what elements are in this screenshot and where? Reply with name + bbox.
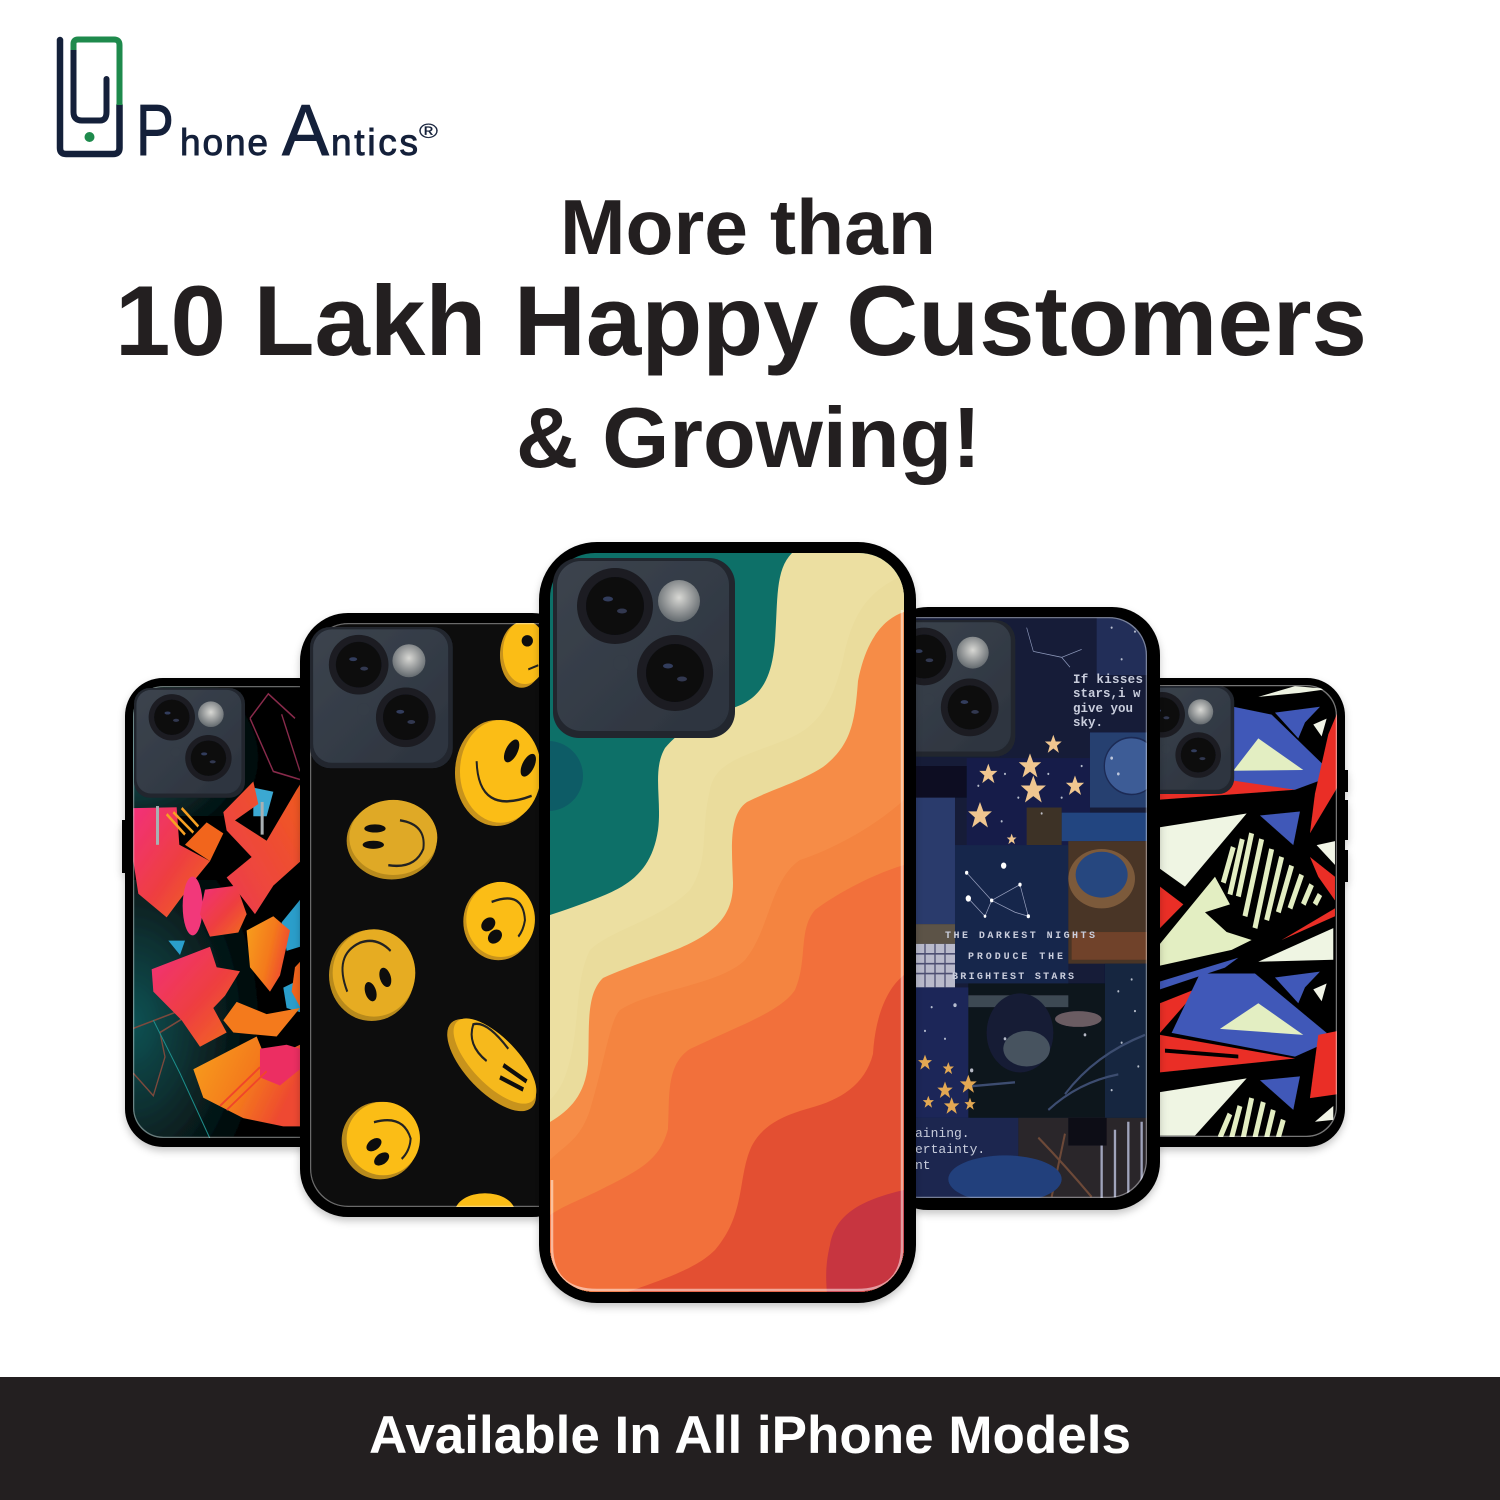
collage text: give you	[1073, 702, 1133, 716]
camera	[134, 688, 245, 798]
collage text	[915, 673, 1143, 1173]
collage text: THE DARKEST NIGHTS	[945, 931, 1095, 942]
logo wordmark: ntics	[331, 122, 418, 163]
collage text: PRODUCE THE	[968, 952, 1063, 963]
smiley 5	[329, 929, 415, 1021]
camera	[877, 620, 1015, 757]
phone case: orange waves (centre)	[513, 542, 916, 1303]
icon: phone logo mark	[60, 40, 120, 154]
smiley 6	[447, 1018, 536, 1112]
logo wordmark: ®	[419, 121, 438, 143]
footer bar	[0, 1377, 1500, 1500]
title	[115, 183, 1367, 486]
smiley 2	[455, 720, 541, 826]
footer text: Available In All iPhone Models	[369, 1406, 1131, 1465]
collage text: sky.	[1073, 716, 1103, 730]
camera	[553, 558, 735, 738]
smiley 1	[500, 623, 539, 688]
smiley 4	[463, 882, 535, 960]
camera	[310, 627, 453, 768]
phone case: smileys	[296, 613, 539, 1225]
logo wordmark	[136, 91, 438, 171]
phone case: graffiti (far left)	[118, 678, 300, 1155]
wave art	[550, 553, 904, 1292]
collage text: nt	[915, 1158, 931, 1173]
collage text: If kisses	[1073, 673, 1143, 687]
smiley 3	[347, 800, 437, 879]
smiley 8	[456, 1193, 514, 1207]
camera	[1125, 686, 1234, 794]
phone case: starry collage	[916, 607, 1164, 1218]
phone case: geometric (far right)	[1160, 678, 1352, 1155]
collage text: ertainty.	[915, 1142, 985, 1157]
logo wordmark: hone	[180, 122, 268, 163]
logo wordmark: A	[282, 91, 329, 171]
collage text: stars,i w	[1073, 687, 1141, 701]
gloss rim	[552, 610, 902, 1290]
smiley 7	[342, 1102, 420, 1179]
logo: Phone Antics	[60, 40, 438, 171]
collage text: BRIGHTEST STARS	[952, 972, 1074, 983]
title: 10 Lakh Happy Customers	[115, 266, 1367, 377]
title: & Growing!	[516, 391, 981, 486]
title: More than	[560, 183, 936, 271]
logo wordmark: P	[136, 91, 174, 171]
collage text: aining.	[915, 1126, 970, 1141]
